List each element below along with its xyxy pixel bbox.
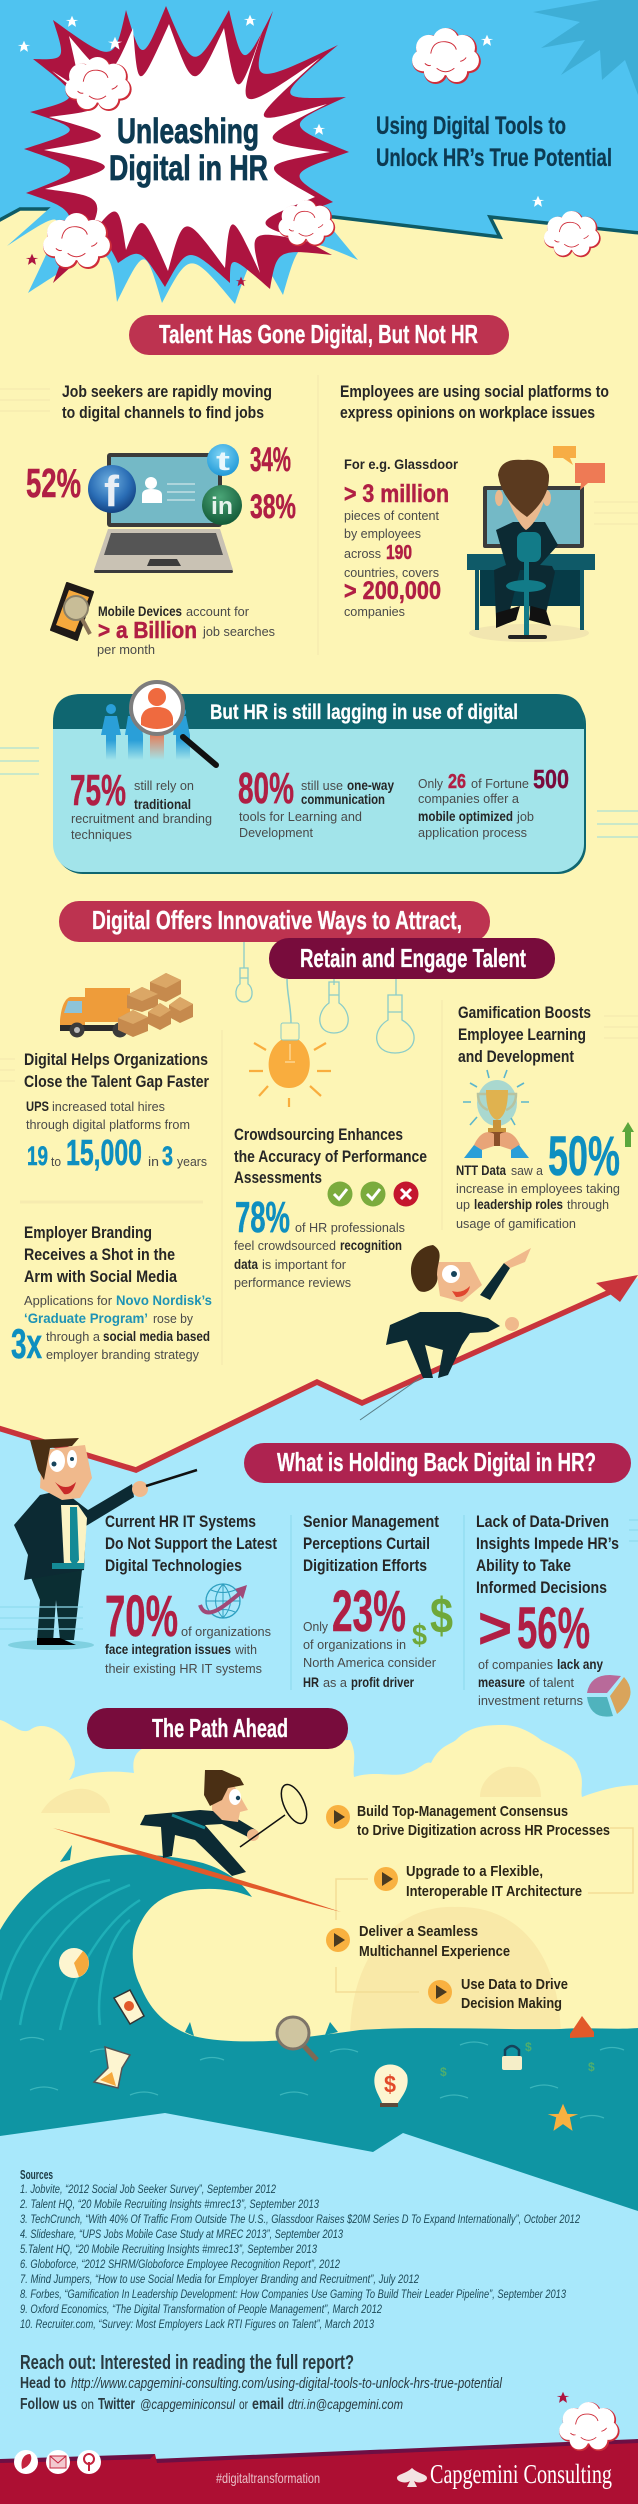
stat: 80% <box>238 764 394 840</box>
text: gamification <box>456 1003 620 1231</box>
text: gamification: saw a <box>511 1163 544 1178</box>
footer band <box>0 2439 638 2504</box>
step: deliver <box>326 1923 510 1960</box>
cloud <box>278 200 335 246</box>
stat: 75%: techniques <box>71 827 132 842</box>
text: gamification: usage of gamification <box>456 1216 576 1231</box>
stat: 80%: Development <box>239 825 313 840</box>
heading pill: path ahead: The Path Ahead <box>152 1713 288 1743</box>
icon: lock <box>502 2046 522 2070</box>
reach out: Twitter <box>98 2396 135 2413</box>
icon: truck with boxes <box>60 973 193 1038</box>
icon: star <box>548 2104 578 2131</box>
title: Unleashing <box>117 112 259 151</box>
text: senior management: Senior Management <box>303 1512 439 1531</box>
icon: laptop <box>94 453 233 573</box>
text: employer branding: 3x <box>11 1320 42 1367</box>
text: crowdsourcing: performance reviews <box>234 1275 351 1290</box>
decorative lines lower <box>0 1515 638 1690</box>
burst: blue shadow <box>7 190 358 304</box>
stat: 75%: 75% <box>70 766 126 815</box>
heading pill: talent: Talent Has Gone Digital, But Not HR <box>159 319 478 349</box>
stat: 26 of 500: 500 <box>533 764 569 794</box>
step: use data: Use Data to Drive <box>461 1976 568 1993</box>
cloud <box>43 213 112 269</box>
text: current HR IT systems: 70% <box>105 1584 178 1649</box>
reach out: email <box>252 2396 284 2413</box>
icon: facebook <box>88 465 136 516</box>
text: data-driven insights: measure <box>478 1674 525 1690</box>
stat: 75%: still rely on <box>134 778 194 793</box>
text: current HR IT systems: face integration issues <box>105 1641 231 1657</box>
sources: 2. Talent HQ, “20 Mobile Recruiting Insights #mrec13”, September 2013 <box>19 2197 319 2211</box>
text: data-driven insights: investment returns <box>478 1693 583 1708</box>
step: upgrade: Upgrade to a Flexible, <box>406 1863 543 1880</box>
text: gamification: and Development <box>458 1047 574 1066</box>
sources <box>19 2167 580 2331</box>
icon: dollar signs: $ <box>430 1588 453 1644</box>
step: use data <box>428 1976 568 2012</box>
stat: 52%: 52% <box>26 460 81 506</box>
stat: 80%: still use <box>301 778 343 793</box>
background: sky <box>0 0 638 320</box>
text: current HR IT systems: with <box>234 1642 257 1657</box>
illustration: surfer <box>53 1770 341 1912</box>
subtitle <box>376 112 612 172</box>
text: gamification: Gamification Boosts <box>458 1003 591 1022</box>
subhead: job seekers: Job seekers are rapidly moving <box>62 382 272 401</box>
icon: people with magnifier <box>101 682 216 765</box>
step: upgrade: Interoperable IT Architecture <box>406 1883 582 1900</box>
text: data-driven insights: Informed Decisions <box>476 1578 607 1597</box>
text: mobile devices: account for <box>186 604 250 619</box>
icons: check and cross <box>328 1182 418 1206</box>
icon: dollar bulb: $ <box>384 2071 397 2098</box>
text: employer branding: employer branding strategy <box>46 1347 199 1362</box>
burst: white layer <box>44 24 330 273</box>
reach out: Reach out: Interested in reading the full report? <box>20 2352 354 2374</box>
cloud <box>559 2402 620 2451</box>
stat: 26 of 500 <box>418 764 569 840</box>
text: gamification: up <box>456 1197 470 1212</box>
reach out: Head to <box>20 2375 66 2392</box>
sources: 7. Mind Jumpers, “How to use Social Media for Employer Branding and Recruitment”, July 2012 <box>20 2272 419 2286</box>
text: glassdoor stats: countries, covers <box>344 565 439 580</box>
heading pill: digital offers: Digital Offers Innovative Ways to Attract, <box>92 905 462 935</box>
stat: 26 of 500: companies offer a <box>418 791 520 806</box>
step: upgrade <box>374 1863 582 1900</box>
stat: 26 of 500: of Fortune <box>471 776 529 791</box>
text: employer branding: rose by <box>153 1311 193 1326</box>
icon: man at desk <box>467 446 605 642</box>
icon: green up arrow <box>622 1122 634 1147</box>
text: talent gap: Close the Talent Gap Faster <box>24 1072 209 1091</box>
text: talent gap: 15,000 <box>66 1132 142 1173</box>
stat: 75% <box>70 766 212 842</box>
icon: small dollars: $ <box>525 2040 532 2054</box>
rising red arrow line <box>0 1275 638 1470</box>
text: current HR IT systems: Digital Technologies <box>105 1556 242 1575</box>
step: use data: Decision Making <box>461 1995 562 2012</box>
text: gamification: through <box>567 1197 609 1212</box>
sources: 5.Talent HQ, “20 Mobile Recruiting Insights #mrec13”, September 2013 <box>20 2242 317 2256</box>
text: data-driven insights: Ability to Take <box>476 1556 571 1575</box>
subhead: job seekers <box>62 382 272 422</box>
stat: 75%: recruitment and branding <box>71 811 212 826</box>
reach out: dtri.in@capgemini.com <box>288 2396 403 2412</box>
icon: small dollars <box>440 2040 595 2079</box>
stat: 80%: tools for Learning and <box>239 809 362 824</box>
text: senior management: Digitization Efforts <box>303 1556 427 1575</box>
stat: 26 of 500: 26 <box>448 771 466 793</box>
step: build consensus: Build Top-Management Consensus <box>357 1803 568 1820</box>
text: data-driven insights: > <box>478 1596 512 1661</box>
social icons <box>14 2450 101 2474</box>
heading pill: retain <box>269 938 555 979</box>
text: current HR IT systems: their existing HR IT systems <box>105 1661 262 1676</box>
text: senior management: Only <box>303 1619 328 1634</box>
heading pill: retain: Retain and Engage Talent <box>300 943 526 973</box>
icon: linkedin: in <box>211 493 233 520</box>
stat: 34%: 34% <box>250 441 291 479</box>
decorative lines top <box>0 375 638 1365</box>
text: talent gap: to <box>51 1154 61 1169</box>
text: current HR IT systems <box>105 1512 277 1676</box>
illustration: wave and sea <box>0 1845 638 2211</box>
step: deliver: Multichannel Experience <box>359 1943 510 1960</box>
text: talent gap <box>24 1050 209 1173</box>
reach out <box>20 2352 503 2413</box>
text: glassdoor stats: > 200,000 <box>344 577 441 605</box>
stat: 80%: 80% <box>238 764 294 813</box>
text: glassdoor stats <box>344 456 458 619</box>
text: mobile devices: Mobile Devices <box>98 603 182 619</box>
icon: globe with arrow <box>200 1584 247 1618</box>
sources: 1. Jobvite, “2012 Social Job Seeker Survey”, September 2012 <box>20 2182 276 2196</box>
sources: 10. Recruiter.com, “Survey: Most Employers Lack RTI Figures on Talent”, March 2013 <box>20 2317 374 2331</box>
text: employer branding: social media based <box>103 1328 210 1344</box>
subhead: employees <box>340 382 609 422</box>
burst: red layer <box>24 6 349 289</box>
text: mobile devices: job searches <box>202 624 275 639</box>
text: senior management: of organizations in <box>303 1637 406 1652</box>
text: current HR IT systems: Current HR IT Systems <box>105 1512 256 1531</box>
icon: orange bulb <box>249 979 331 1107</box>
panel heading: But HR is still lagging in use of digital <box>210 701 518 724</box>
icon: dollar signs <box>412 1588 453 1652</box>
icon: pie <box>59 1948 89 1978</box>
reach out: http://www.capgemini-consulting.com/using-digital-tools-to-unlock-hrs-true-potential <box>71 2375 503 2392</box>
text: data-driven insights: of talent <box>529 1675 574 1690</box>
subhead: job seekers: to digital channels to find jobs <box>62 403 264 422</box>
reach out: Follow us <box>20 2396 77 2413</box>
text: talent gap: years <box>177 1154 207 1169</box>
icon: phone with magnifier <box>51 583 93 640</box>
hashtag: #digitaltransformation <box>216 2470 320 2486</box>
text: data-driven insights: 56% <box>517 1596 590 1661</box>
text: gamification: NTT Data <box>456 1162 506 1178</box>
icon: trophy <box>463 1070 529 1158</box>
text: glassdoor stats: For e.g. Glassdoor <box>344 456 458 472</box>
text: employer branding: Receives a Shot in the <box>24 1245 175 1264</box>
stat: 75%: traditional <box>134 796 191 812</box>
text: data-driven insights: of companies <box>478 1657 553 1672</box>
text: glassdoor stats: pieces of content <box>344 508 439 523</box>
text: senior management: Perceptions Curtail <box>303 1534 430 1553</box>
icon: pie chart <box>587 1675 631 1717</box>
icon: small dollars: $ <box>440 2065 447 2079</box>
icon: hourglass <box>94 2047 130 2088</box>
text: senior management: 23% <box>332 1579 406 1644</box>
stat: 26 of 500: Only <box>418 776 443 791</box>
text: glassdoor stats: 190 <box>386 542 412 564</box>
red star <box>557 2392 569 2403</box>
text: mobile devices: per month <box>97 642 155 657</box>
background: cream page <box>0 209 638 1500</box>
text: crowdsourcing: 78% <box>235 1193 290 1242</box>
reach out: or <box>239 2396 248 2412</box>
text: employer branding: Novo Nordisk’s <box>116 1292 212 1308</box>
panel: HR lagging <box>53 682 586 874</box>
icon: bag <box>570 2016 594 2038</box>
text: senior management: North America consider <box>303 1655 437 1670</box>
text: talent gap: 3 <box>162 1141 173 1171</box>
text: employer branding: Applications for <box>24 1293 113 1308</box>
subtitle: Using Digital Tools to <box>376 112 566 140</box>
text: employer branding: Employer Branding <box>24 1223 152 1242</box>
text: talent gap: UPS <box>26 1098 49 1114</box>
heading pill: path ahead <box>87 1708 348 1749</box>
icon: twitter <box>207 444 239 476</box>
stars <box>18 15 544 207</box>
text: glassdoor stats: > 3 million <box>344 480 449 508</box>
cloud <box>412 28 481 84</box>
text: senior management: as a <box>323 1675 348 1690</box>
icon: magnifier <box>277 2017 317 2060</box>
logo: spade <box>397 2468 427 2487</box>
stat: 26 of 500: application process <box>418 825 527 840</box>
heading pill: digital offers <box>59 901 490 942</box>
icon: twitter: t <box>216 446 230 476</box>
stat: 80%: communication <box>301 791 385 807</box>
text: glassdoor stats: across <box>344 546 381 561</box>
text: gamification: leadership roles <box>474 1196 563 1212</box>
icon: small dollars: $ <box>588 2060 595 2074</box>
sources: 9. Oxford Economics, “The Digital Transformation of People Management”, March 2012 <box>20 2302 382 2316</box>
cloud <box>65 57 132 111</box>
text: employer branding: Arm with Social Media <box>24 1267 177 1286</box>
text: crowdsourcing: data <box>234 1256 258 1272</box>
connector lines <box>336 1828 633 1992</box>
text: glassdoor stats: by employees <box>344 526 421 541</box>
text: crowdsourcing: Assessments <box>234 1168 322 1187</box>
text: gamification: Employee Learning <box>458 1025 586 1044</box>
background: cloud mounds <box>41 1767 561 2040</box>
text: data-driven insights: lack any <box>557 1656 603 1672</box>
title <box>109 112 268 188</box>
text: current HR IT systems: Do Not Support the Latest <box>105 1534 277 1553</box>
text: current HR IT systems: of organizations <box>181 1624 271 1639</box>
illustration: climbing man <box>360 1245 531 1420</box>
text: crowdsourcing: Crowdsourcing Enhances <box>234 1125 403 1144</box>
text: employer branding: ‘Graduate Program’ <box>24 1310 148 1326</box>
background: lower blue sky <box>0 1278 638 2504</box>
stat: 80%: one-way <box>347 777 394 793</box>
stat: 26 of 500: mobile optimized <box>418 808 513 824</box>
icon: dollar bulb <box>374 2064 408 2107</box>
text: mobile devices: > a Billion <box>98 617 197 643</box>
sources: Sources <box>20 2167 53 2182</box>
text: data-driven insights <box>476 1512 619 1708</box>
icon: facebook: f <box>104 467 119 516</box>
text: employer branding <box>11 1223 212 1367</box>
stat: 38%: 38% <box>250 488 296 526</box>
text: crowdsourcing: of HR professionals <box>295 1220 405 1235</box>
icon: phone <box>114 1990 144 2024</box>
heading pill: holding back <box>244 1443 631 1483</box>
icon: linkedin <box>202 485 242 525</box>
text: talent gap: in <box>148 1154 159 1169</box>
text: talent gap: increased total hires <box>52 1099 165 1114</box>
text: glassdoor stats: companies <box>344 604 405 619</box>
illustration: presenter <box>8 1438 197 1650</box>
title: Digital in HR <box>109 149 268 188</box>
background: torn edge <box>0 209 638 237</box>
text: senior management <box>303 1512 439 1690</box>
background: corner sunburst <box>533 0 638 95</box>
text: senior management: HR <box>303 1674 319 1690</box>
background: cream clouds <box>0 1720 638 2060</box>
text: senior management: profit driver <box>351 1674 414 1690</box>
text: crowdsourcing: is important for <box>262 1257 347 1272</box>
sources: 4. Slideshare, “UPS Jobs Mobile Case Study at MREC 2013”, September 2013 <box>20 2227 343 2241</box>
step: build consensus <box>326 1803 610 1839</box>
text: talent gap: through digital platforms from <box>26 1117 190 1132</box>
floating icons <box>59 1948 595 2131</box>
reach out: @capgeminiconsul <box>140 2396 236 2412</box>
icon: dollar signs: $ <box>412 1619 427 1652</box>
icon: hanging bulbs outline <box>236 942 414 1053</box>
step: deliver: Deliver a Seamless <box>359 1923 478 1940</box>
text: crowdsourcing: feel crowdsourced <box>234 1238 336 1253</box>
text: crowdsourcing: recognition <box>340 1237 402 1253</box>
stat: 26 of 500: job <box>516 809 534 824</box>
reach out: on <box>81 2396 94 2412</box>
text: gamification: increase in employees taking <box>456 1181 620 1196</box>
text: employer branding: through a <box>46 1329 101 1344</box>
cloud <box>544 211 601 257</box>
text: data-driven insights: Lack of Data-Driven <box>476 1512 609 1531</box>
text: talent gap: Digital Helps Organizations <box>24 1050 208 1069</box>
red stars <box>26 254 246 286</box>
text: crowdsourcing <box>234 1125 427 1290</box>
text: talent gap: 19 <box>27 1141 48 1171</box>
text: mobile devices <box>97 603 275 657</box>
sources: 6. Globoforce, “2012 SHRM/Globoforce Employee Recognition Report”, 2012 <box>20 2257 340 2271</box>
text: crowdsourcing: the Accuracy of Performance <box>234 1147 427 1166</box>
heading pill: talent <box>129 315 509 355</box>
